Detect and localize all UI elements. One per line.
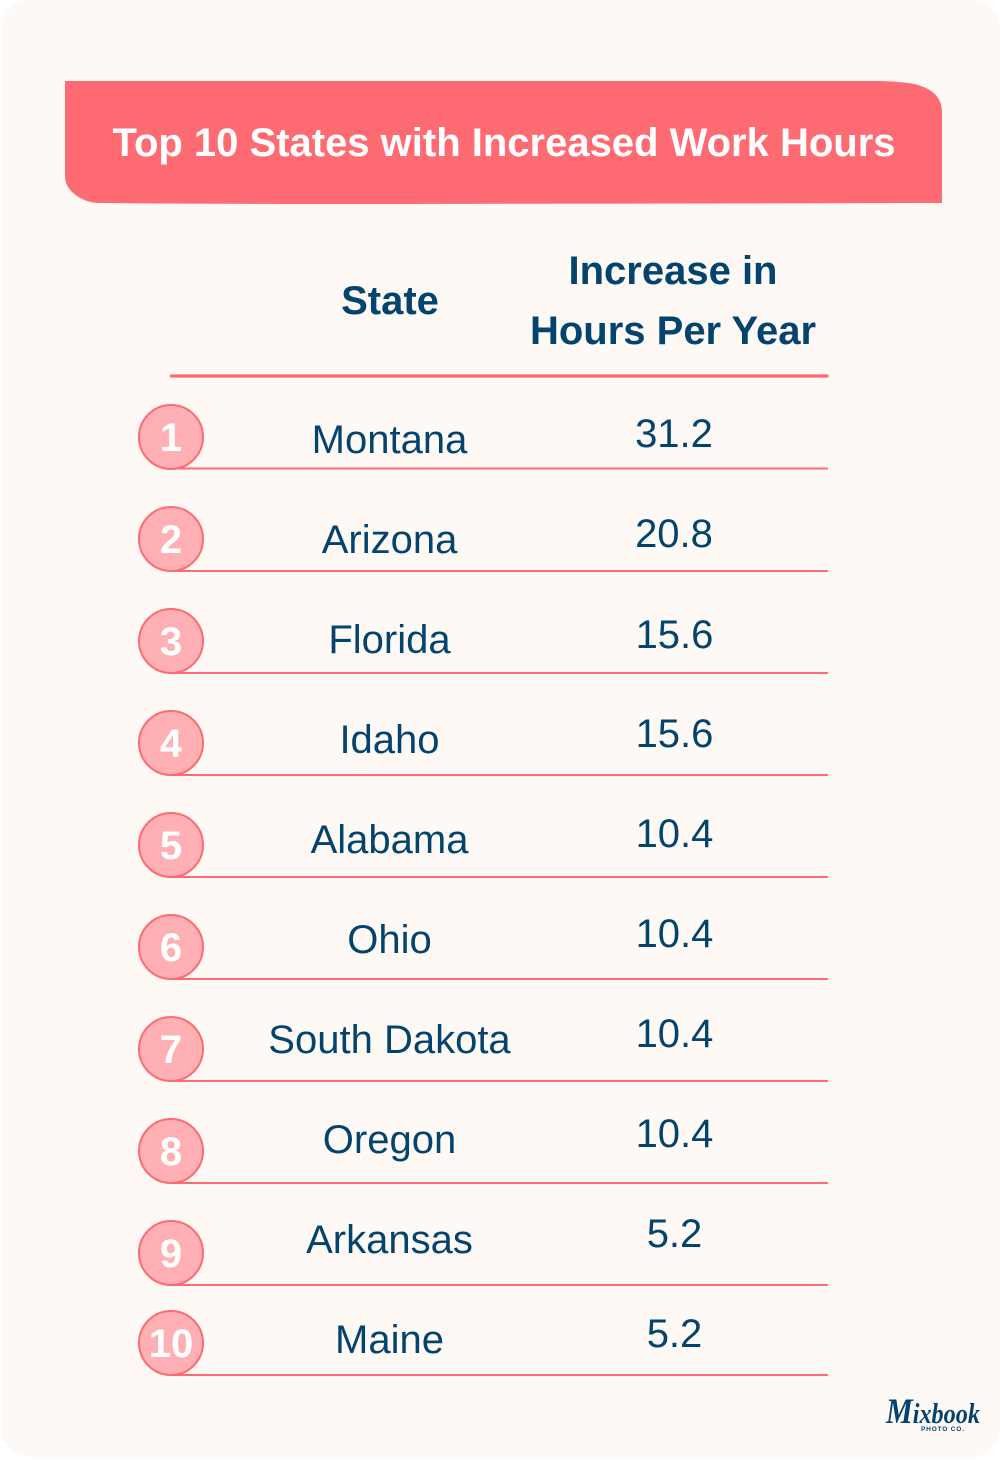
row 9: Arkansas: 9: [160, 1232, 182, 1276]
row 10: Maine: 5.2: [647, 1312, 702, 1356]
row 1: Montana: 1: [160, 416, 182, 460]
row 10: Maine: Maine: [335, 1318, 444, 1362]
row 5: Alabama: 5: [160, 824, 182, 868]
row 2: Arizona: Arizona: [322, 518, 458, 562]
row 10: Maine: 10: [149, 1322, 193, 1366]
column heading: Increase in Hours Per Year: Hours Per Year: [530, 309, 816, 353]
logo: Mixbook Photo Co.: Mixbook: [885, 1391, 980, 1431]
row 1: Montana: [139, 405, 828, 469]
row 7: South Dakota: South Dakota: [268, 1018, 511, 1062]
row 1: Montana: 31.2: [635, 412, 713, 456]
row 8: Oregon: [139, 1112, 828, 1183]
column heading: Increase in Hours Per Year: Increase in: [568, 249, 778, 293]
row 4: Idaho: Idaho: [339, 718, 440, 762]
row 6: Ohio: [139, 912, 828, 979]
row 10: Maine: [139, 1311, 828, 1375]
row 3: Florida: Florida: [328, 618, 451, 662]
row 7: South Dakota: [139, 1012, 828, 1081]
row 1: Montana: Montana: [312, 418, 468, 462]
row 2: Arizona: 20.8: [635, 512, 713, 556]
row 9: Arkansas: 5.2: [647, 1212, 702, 1256]
row 3: Florida: 3: [160, 620, 182, 664]
row 2: Arizona: 2: [160, 518, 182, 562]
row 6: Ohio: Ohio: [347, 918, 432, 962]
header rule: [172, 374, 827, 378]
title: Top 10 States with Increased Work Hours: [112, 121, 896, 165]
row 4: Idaho: 15.6: [636, 712, 713, 756]
title banner: [65, 81, 942, 204]
row 8: Oregon: 8: [160, 1130, 182, 1174]
row 5: Alabama: [139, 812, 828, 877]
row 7: South Dakota: 10.4: [636, 1012, 713, 1056]
row 8: Oregon: 10.4: [636, 1112, 713, 1156]
row 9: Arkansas: Arkansas: [306, 1218, 473, 1262]
row 3: Florida: 15.6: [636, 613, 713, 657]
column heading: State: State: [341, 279, 439, 323]
row 4: Idaho: [139, 711, 828, 775]
logo: Mixbook Photo Co.: PHOTO CO.: [921, 1426, 964, 1433]
row 3: Florida: [139, 609, 828, 673]
row 2: Arizona: [139, 507, 828, 571]
row 8: Oregon: Oregon: [323, 1118, 456, 1162]
row 7: South Dakota: 7: [160, 1028, 182, 1072]
row 5: Alabama: 10.4: [636, 812, 713, 856]
row 4: Idaho: 4: [160, 722, 183, 766]
row 5: Alabama: Alabama: [311, 818, 469, 862]
column heading: Increase in Hours Per Year: [530, 249, 816, 353]
row 6: Ohio: 10.4: [636, 912, 713, 956]
row 6: Ohio: 6: [160, 926, 182, 970]
row 9: Arkansas: [139, 1212, 828, 1285]
